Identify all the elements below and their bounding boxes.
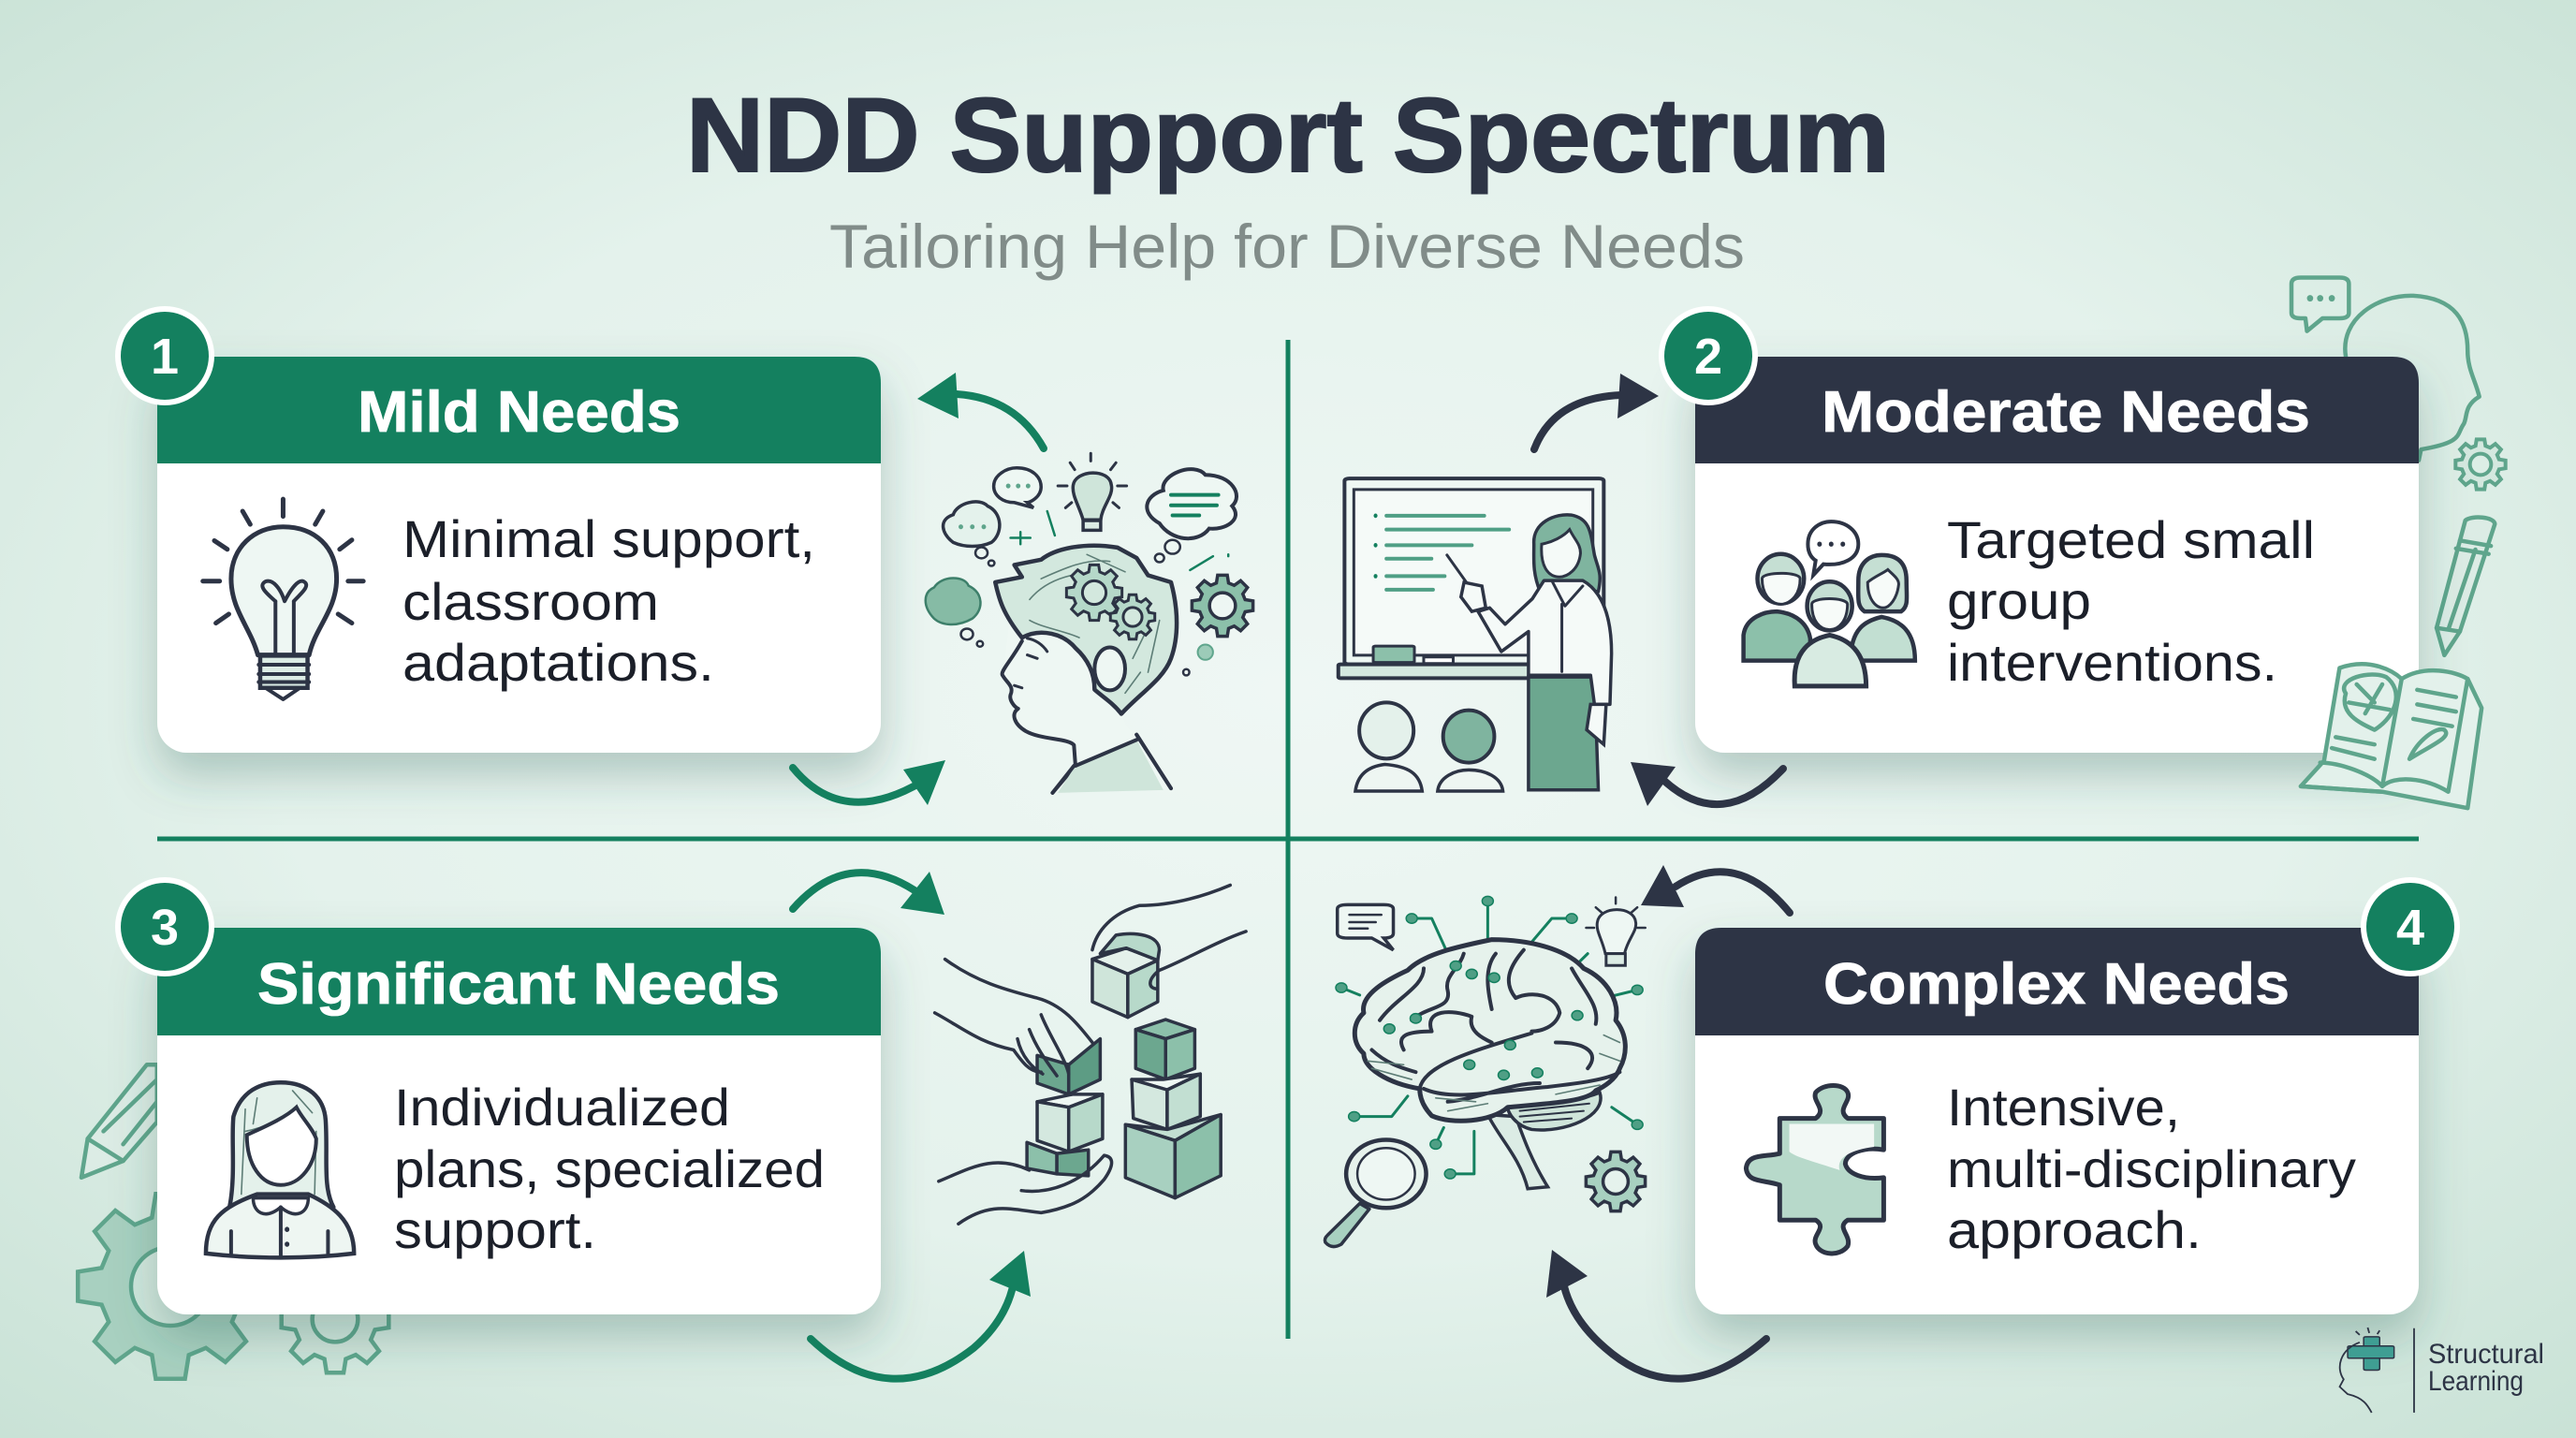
description: Individualized bbox=[394, 1078, 730, 1137]
description bbox=[1947, 510, 2315, 692]
subtitle: Tailoring Help for Diverse Needs bbox=[829, 212, 1745, 281]
badge 2: 2 bbox=[1694, 329, 1722, 385]
logo: structural learning: Learning bbox=[2428, 1366, 2524, 1397]
panel: complex needs bbox=[1695, 928, 2419, 1314]
illustration: brain with network nodes bbox=[1325, 896, 1646, 1247]
description bbox=[394, 1078, 825, 1259]
heading: complex needs: Complex Needs bbox=[1823, 952, 2290, 1017]
heading: mild needs: Mild Needs bbox=[358, 380, 681, 445]
badge 4 bbox=[2361, 877, 2460, 976]
illustration: boy's gears bbox=[1066, 565, 1253, 639]
description: Intensive, bbox=[1947, 1078, 2180, 1137]
illustration: brain's gear bbox=[1586, 1152, 1646, 1211]
description: group bbox=[1947, 571, 2091, 630]
description: Minimal support, bbox=[402, 509, 815, 568]
arrow: moderate bottom bbox=[1631, 762, 1783, 806]
description bbox=[402, 509, 815, 692]
description: classroom bbox=[402, 572, 659, 631]
description: plans, specialized bbox=[394, 1139, 825, 1198]
badge 3 bbox=[115, 877, 214, 976]
icon: small group bbox=[1744, 521, 1915, 686]
badge 1: 1 bbox=[151, 329, 179, 385]
decoration: small gear bottom left bbox=[282, 1266, 388, 1372]
icon: light bulb bbox=[203, 499, 363, 699]
decoration: big gear bottom left bbox=[78, 1194, 263, 1379]
decoration: pencil right bbox=[2437, 518, 2495, 655]
heading: significant needs: Significant Needs bbox=[257, 952, 780, 1017]
vertical divider bbox=[1286, 340, 1290, 1339]
icon: puzzle piece bbox=[1746, 1085, 1883, 1254]
logo: structural learning bbox=[2340, 1328, 2544, 1413]
decoration: pencil left bbox=[81, 1064, 157, 1178]
arrow: complex top bbox=[1641, 865, 1790, 913]
panel: mild needs bbox=[157, 357, 881, 753]
illustration: teacher at whiteboard bbox=[1339, 478, 1612, 791]
panel: moderate needs bbox=[1695, 357, 2419, 753]
description: multi-disciplinary bbox=[1947, 1139, 2356, 1198]
decoration: head outline with speech bubble and gear, top right bbox=[2291, 277, 2480, 461]
decoration: gear top right bbox=[2455, 439, 2506, 490]
badge 2 bbox=[1659, 306, 1758, 405]
heading: moderate needs: Moderate Needs bbox=[1822, 380, 2310, 445]
badge 3: 3 bbox=[151, 900, 179, 956]
panel: significant needs bbox=[157, 928, 881, 1314]
illustration: boy with thought bubbles bbox=[926, 453, 1237, 793]
description: support. bbox=[394, 1200, 596, 1259]
description bbox=[1947, 1078, 2356, 1259]
illustration: hands stacking blocks bbox=[935, 885, 1246, 1224]
arrow: mild top bbox=[917, 373, 1044, 448]
badge 1 bbox=[115, 306, 214, 405]
description: approach. bbox=[1947, 1200, 2202, 1259]
badge 4: 4 bbox=[2396, 900, 2424, 956]
horizontal divider bbox=[157, 837, 2419, 841]
title: NDD Support Spectrum bbox=[686, 77, 1890, 194]
icon: individual person bbox=[206, 1082, 354, 1257]
description: adaptations. bbox=[402, 633, 714, 692]
logo: structural learning: Structural bbox=[2428, 1339, 2544, 1370]
arrow: significant top bbox=[793, 872, 944, 915]
arrow: mild bottom bbox=[793, 760, 945, 805]
description: Targeted small bbox=[1947, 510, 2315, 569]
description: interventions. bbox=[1947, 633, 2277, 692]
decoration: open book overlapping card bbox=[2301, 664, 2481, 808]
arrow: complex bottom bbox=[1546, 1250, 1766, 1379]
arrow: moderate top bbox=[1534, 374, 1659, 449]
arrow: significant bottom bbox=[811, 1251, 1031, 1379]
